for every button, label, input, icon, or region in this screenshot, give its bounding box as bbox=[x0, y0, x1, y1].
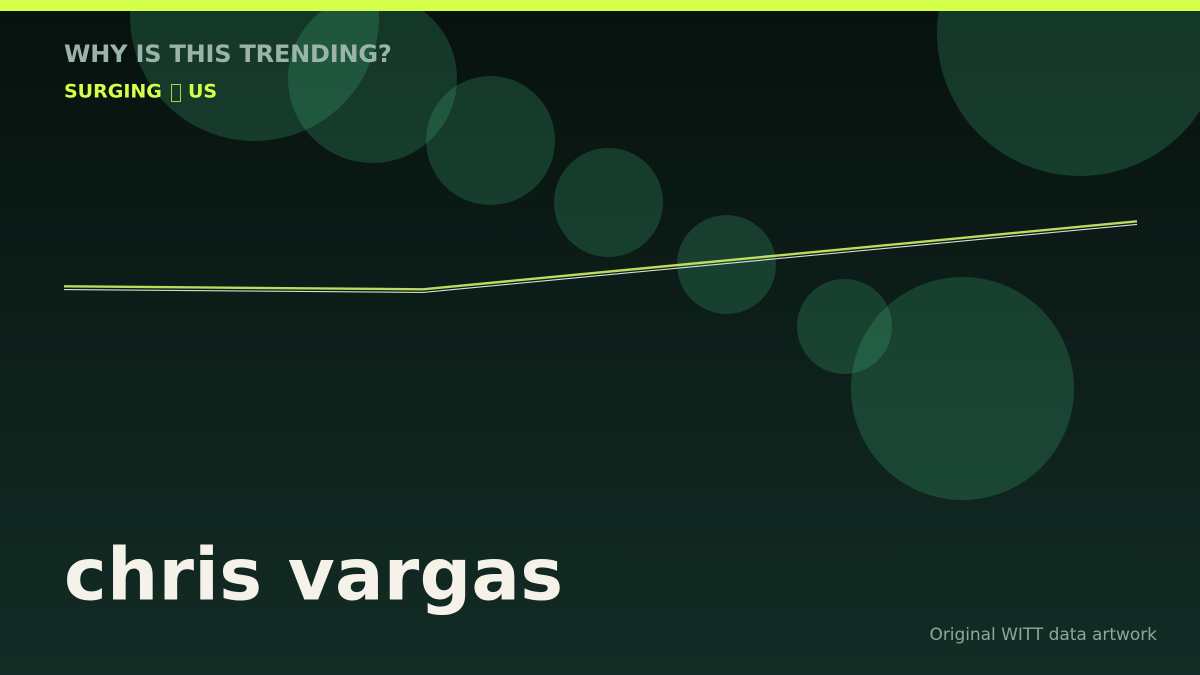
main title: chris vargas bbox=[64, 532, 563, 616]
trend line bbox=[64, 221, 1137, 292]
status label: US bbox=[188, 80, 217, 102]
heading: WHY IS THIS TRENDING? bbox=[64, 40, 392, 68]
status label: SURGING bbox=[64, 80, 162, 102]
footer credit: Original WITT data artwork bbox=[930, 625, 1157, 645]
top accent bar bbox=[0, 0, 1200, 11]
status label bbox=[64, 80, 217, 102]
bubble cluster bbox=[130, 0, 1200, 500]
